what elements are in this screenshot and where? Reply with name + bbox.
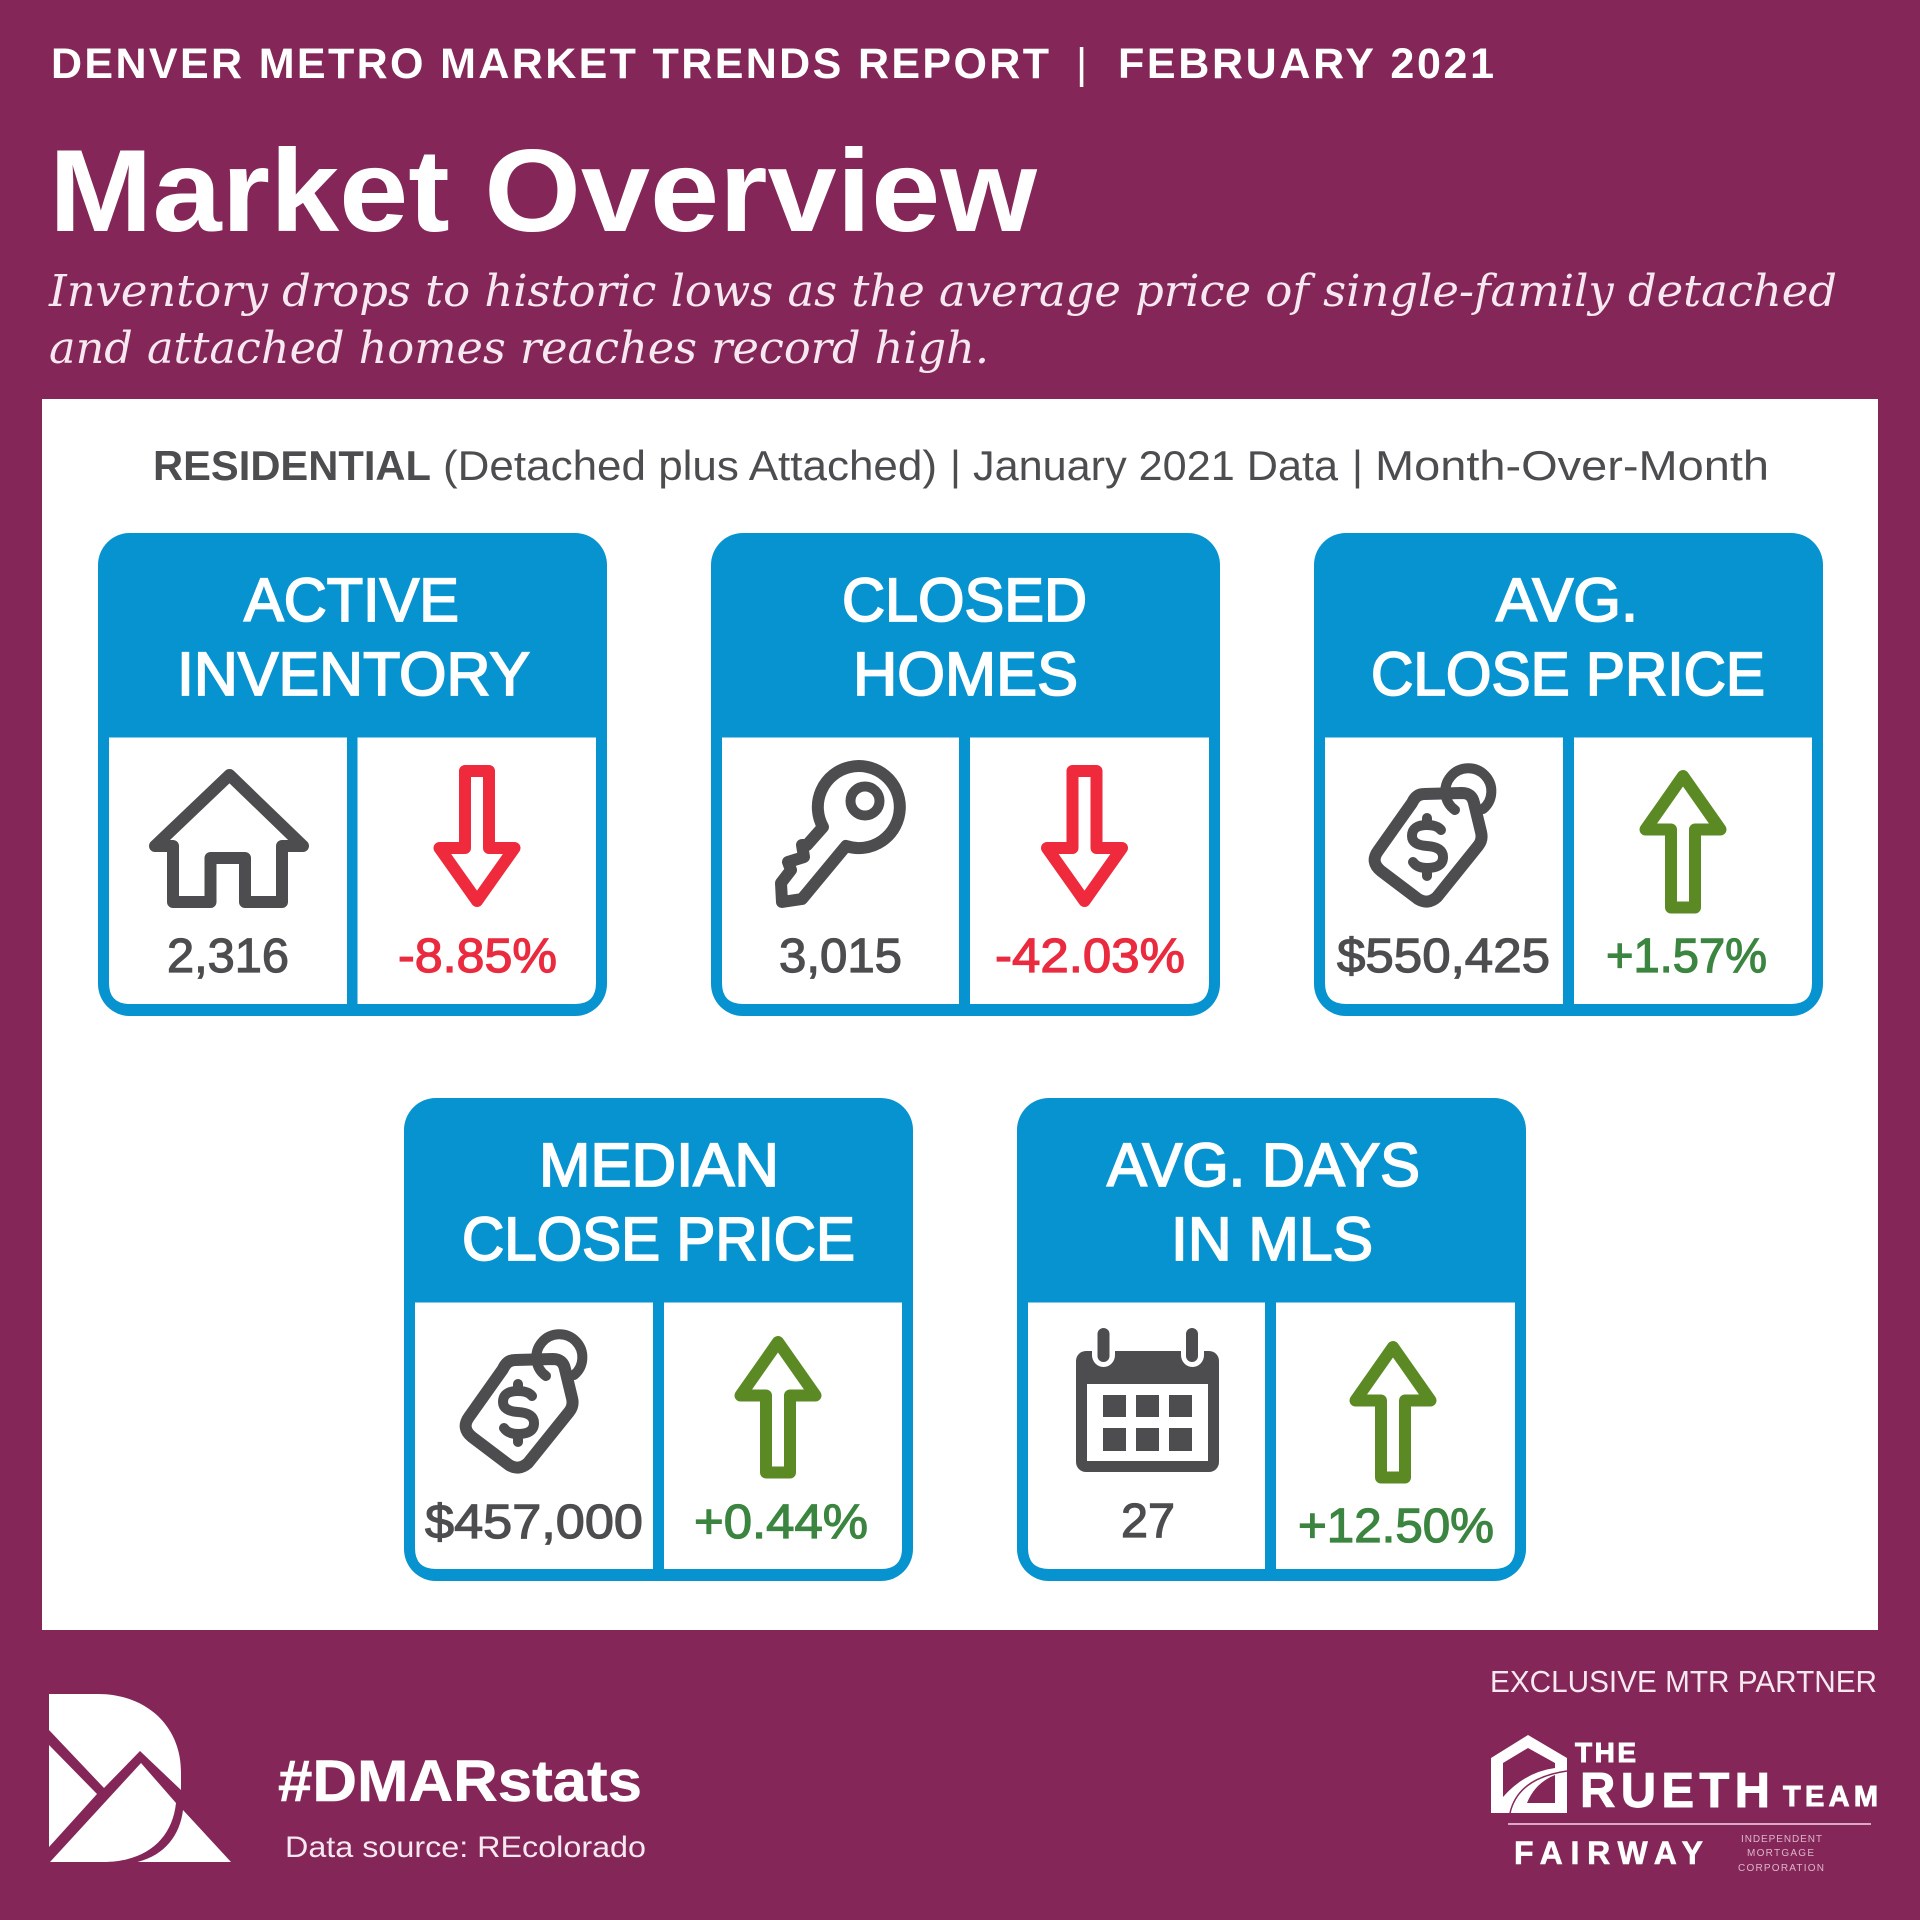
change: +1.57% <box>1606 930 1767 983</box>
panel heading: | <box>950 442 961 489</box>
card heading <box>1371 566 1765 708</box>
card heading: AVG. DAYS <box>1107 1131 1420 1199</box>
change: +0.44% <box>694 1496 868 1549</box>
value: $457,000 <box>425 1496 643 1549</box>
data source: Data source: REcolorado <box>285 1831 646 1864</box>
panel heading <box>153 442 1769 489</box>
team name: THE <box>1575 1737 1636 1768</box>
mortgage corporation: MORTGAGE <box>1747 1848 1814 1859</box>
subtitle: and attached homes reaches record high. <box>49 323 989 374</box>
panel heading: Month-Over-Month <box>1375 442 1769 489</box>
card heading: MEDIAN <box>539 1131 779 1199</box>
change: -8.85% <box>398 930 557 983</box>
panel heading: (Detached plus Attached) <box>443 442 937 489</box>
hashtag: #DMARstats <box>278 1749 642 1814</box>
card: median close price <box>404 1098 913 1581</box>
mortgage corporation <box>1738 1834 1824 1874</box>
team name: RUETH <box>1580 1764 1770 1818</box>
card heading: AVG. <box>1496 566 1638 634</box>
subtitle: Inventory drops to historic lows as the average price of single-family detached <box>48 266 1837 317</box>
title: Market Overview <box>49 125 1038 256</box>
card heading <box>1107 1131 1420 1273</box>
arrow: down <box>1047 771 1122 901</box>
card heading <box>177 566 530 708</box>
mortgage corporation: CORPORATION <box>1738 1863 1824 1874</box>
card heading: CLOSED <box>842 566 1087 634</box>
report heading: | <box>1076 40 1087 88</box>
card heading: CLOSE PRICE <box>462 1205 855 1273</box>
report heading: FEBRUARY 2021 <box>1118 40 1494 88</box>
card: avg close price <box>1314 533 1823 1016</box>
report heading: DENVER METRO MARKET TRENDS REPORT <box>51 40 1049 88</box>
value: 27 <box>1121 1495 1175 1548</box>
fairway: FAIRWAY <box>1514 1835 1703 1871</box>
subtitle <box>48 266 1837 374</box>
arrow: up <box>1646 776 1720 908</box>
arrow: down <box>440 771 514 901</box>
icon: price tag <box>1375 768 1491 902</box>
card heading: HOMES <box>853 640 1078 708</box>
card heading: ACTIVE <box>244 566 459 634</box>
card heading: IN MLS <box>1171 1205 1373 1273</box>
card heading: CLOSE PRICE <box>1371 640 1765 708</box>
panel heading: RESIDENTIAL <box>153 442 431 489</box>
card: active inventory <box>98 533 607 1016</box>
logo: The Rueth Team <box>1491 1735 1878 1874</box>
panel: residential data <box>42 399 1878 1630</box>
icon: key <box>781 766 900 902</box>
icon: house and road <box>1491 1735 1567 1813</box>
logo: DMAR <box>49 1694 231 1862</box>
arrow: up <box>1356 1347 1430 1478</box>
arrow: up <box>740 1342 816 1472</box>
partner label: EXCLUSIVE MTR PARTNER <box>1490 1664 1877 1699</box>
card: avg days in mls <box>1017 1098 1526 1581</box>
mortgage corporation: INDEPENDENT <box>1741 1834 1822 1845</box>
change: +12.50% <box>1298 1500 1494 1553</box>
value: $550,425 <box>1337 930 1550 983</box>
icon: price tag <box>466 1334 582 1468</box>
panel heading: | <box>1352 442 1363 489</box>
icon: calendar <box>1076 1328 1219 1472</box>
value: 3,015 <box>779 930 902 983</box>
value: 2,316 <box>167 930 289 983</box>
card heading <box>842 566 1087 708</box>
icon: house <box>155 775 303 902</box>
report heading <box>51 40 1494 88</box>
card heading: INVENTORY <box>177 640 530 708</box>
team name <box>1575 1737 1878 1818</box>
card heading <box>462 1131 855 1273</box>
change: -42.03% <box>995 930 1185 983</box>
team name: TEAM <box>1783 1781 1878 1813</box>
panel heading: January 2021 Data <box>973 442 1339 489</box>
card: closed homes <box>711 533 1220 1016</box>
